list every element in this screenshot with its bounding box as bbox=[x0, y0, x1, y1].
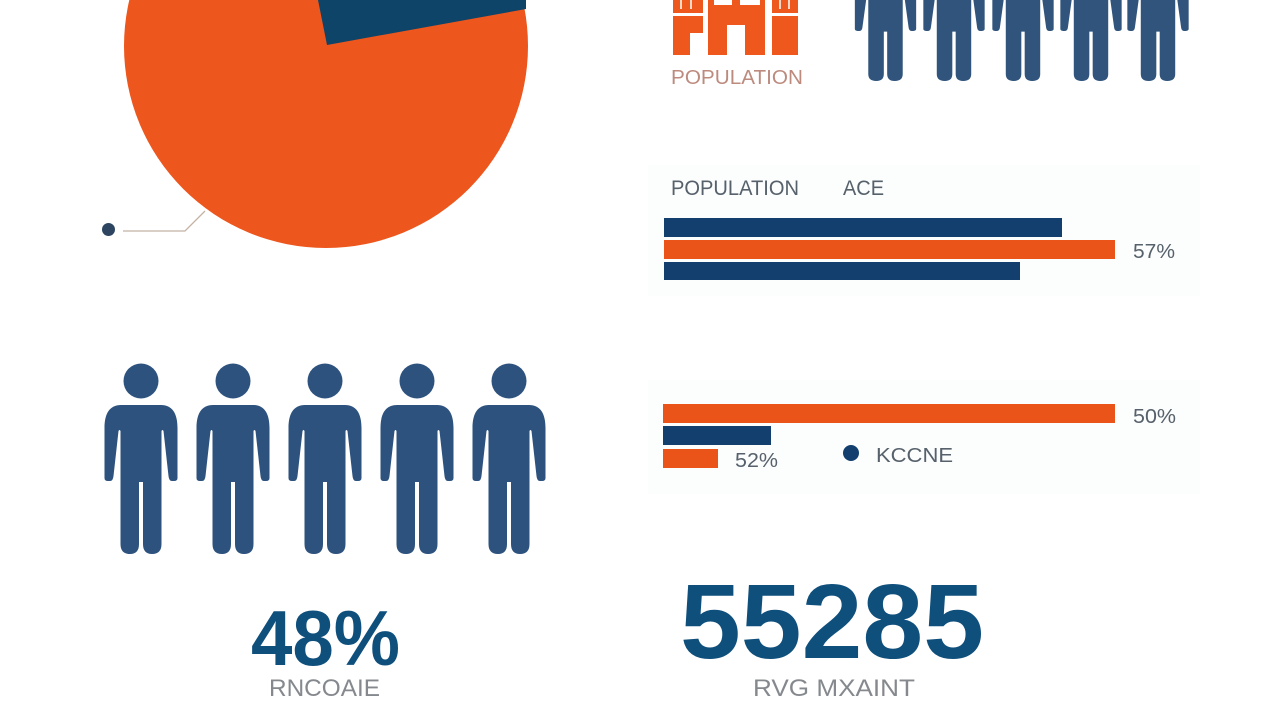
pie slice: navy wedge bbox=[318, 0, 526, 45]
heading: age: ACE bbox=[843, 177, 884, 200]
stat number: 55285 bbox=[680, 563, 984, 681]
panel background bbox=[648, 380, 1200, 494]
legend label: KCCNE bbox=[876, 445, 953, 467]
icon label: POPULATION bbox=[671, 67, 803, 89]
top row of people icons bbox=[855, 0, 1189, 81]
person 5 bbox=[1127, 0, 1189, 81]
icon: orange building bbox=[673, 0, 798, 55]
stat number: 48% bbox=[251, 594, 400, 682]
person 5 bbox=[472, 364, 546, 554]
panel: income bars bbox=[648, 380, 1200, 494]
population icon with label bbox=[671, 0, 803, 89]
person 2 bbox=[196, 364, 270, 554]
large row of people icons bbox=[104, 364, 546, 554]
legend dot bbox=[843, 445, 859, 461]
value: 50 percent: 50% bbox=[1133, 406, 1176, 428]
person 2 bbox=[923, 0, 985, 81]
stat: 48 percent bbox=[251, 594, 400, 702]
stat caption: RVG MXAINT bbox=[753, 675, 915, 702]
pie callout leader bbox=[102, 211, 205, 236]
person 3 bbox=[288, 364, 362, 554]
stat caption: RNCOAIE bbox=[269, 675, 380, 702]
bar: navy top bbox=[664, 218, 1062, 237]
pie chart bbox=[124, 0, 528, 248]
bar: orange long bbox=[663, 404, 1115, 423]
value: 57 percent: 57% bbox=[1133, 241, 1175, 263]
person 1 bbox=[104, 364, 178, 554]
callout line bbox=[123, 211, 205, 231]
bar: orange middle bbox=[664, 240, 1115, 259]
value: 52 percent: 52% bbox=[735, 450, 778, 472]
person 3 bbox=[992, 0, 1054, 81]
person 4 bbox=[380, 364, 454, 554]
bar: navy short bbox=[663, 426, 771, 445]
panel: population and age bars bbox=[648, 165, 1200, 296]
pie slice: orange majority bbox=[124, 0, 528, 248]
bar: orange short bbox=[663, 449, 718, 468]
heading: population: POPULATION bbox=[671, 177, 799, 200]
stat: 55285 bbox=[680, 563, 984, 702]
person 4 bbox=[1060, 0, 1122, 81]
callout dot bbox=[102, 223, 115, 236]
panel background bbox=[648, 165, 1200, 296]
bar: navy bottom bbox=[664, 262, 1020, 280]
person 1 bbox=[855, 0, 916, 81]
